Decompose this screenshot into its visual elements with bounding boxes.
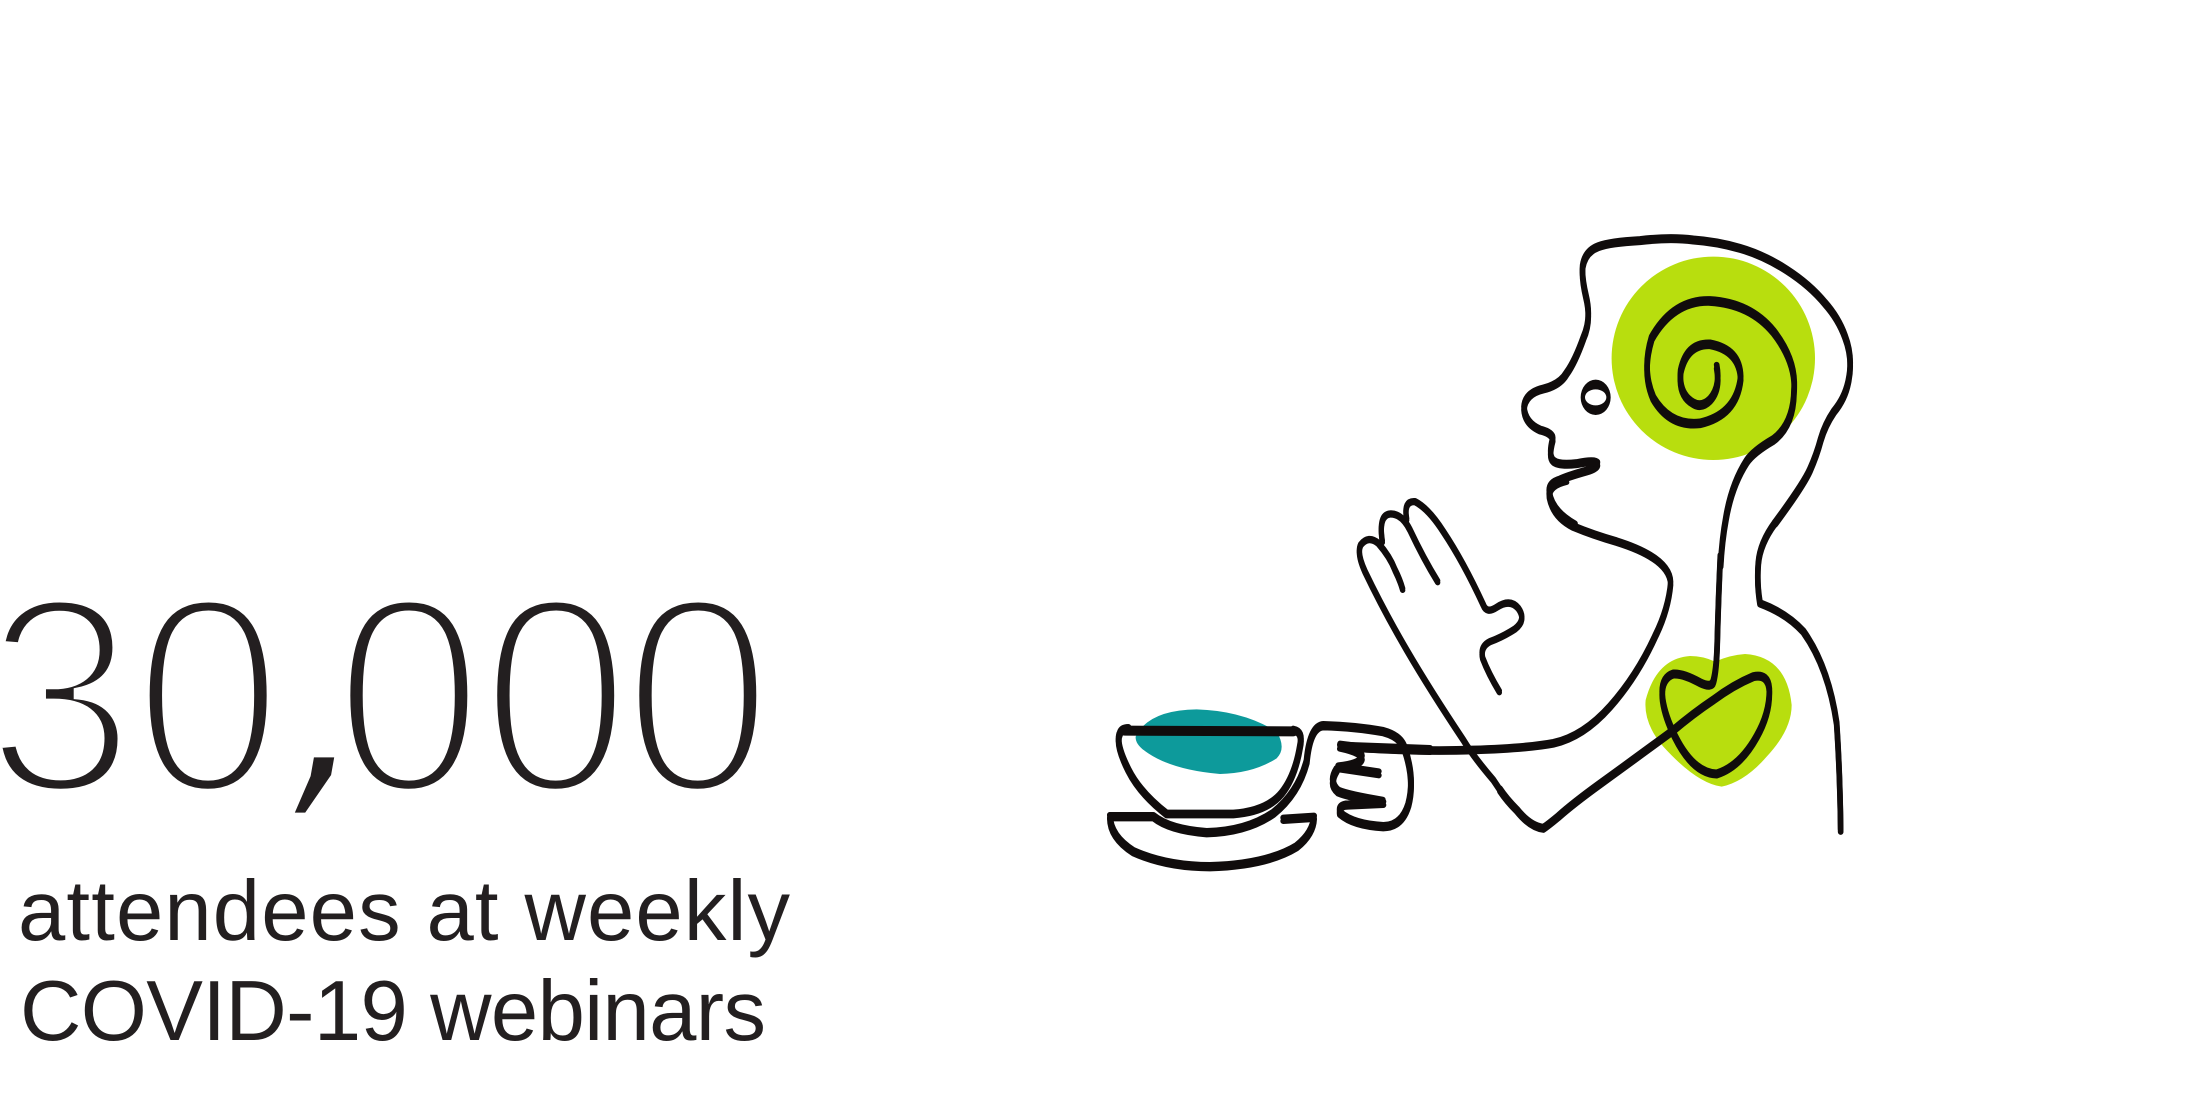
chest and back line [1758,522,1841,832]
saucer [1110,815,1314,868]
gripping fingers [1333,745,1430,804]
illustration: person drinking from a cup [1110,237,1850,868]
eye [1581,380,1611,415]
big number: 30,000 [0,540,773,852]
saucer rim and cup handle [1110,724,1411,834]
heart highlight [1645,654,1792,787]
caption line: attendees at weekly: attendees at weekly [18,864,790,959]
spiral and neck line [1647,299,1794,567]
head, face and back outline [1524,237,1850,527]
big number: 30,000: , [265,549,399,847]
cup tea fill [1136,709,1282,774]
head highlight [1612,257,1815,460]
cup bowl [1119,727,1301,815]
heart line and diagonal arm [1500,522,1841,832]
cup and saucer [1110,724,1430,868]
chin, chest and upper arm line [1340,479,1671,752]
big number: 30,000: 000 [334,540,773,852]
caption line: COVID-19 webinars: COVID-19 webinars [20,964,766,1059]
cup rim [1125,716,1293,746]
hand and forearm [1359,501,1522,791]
